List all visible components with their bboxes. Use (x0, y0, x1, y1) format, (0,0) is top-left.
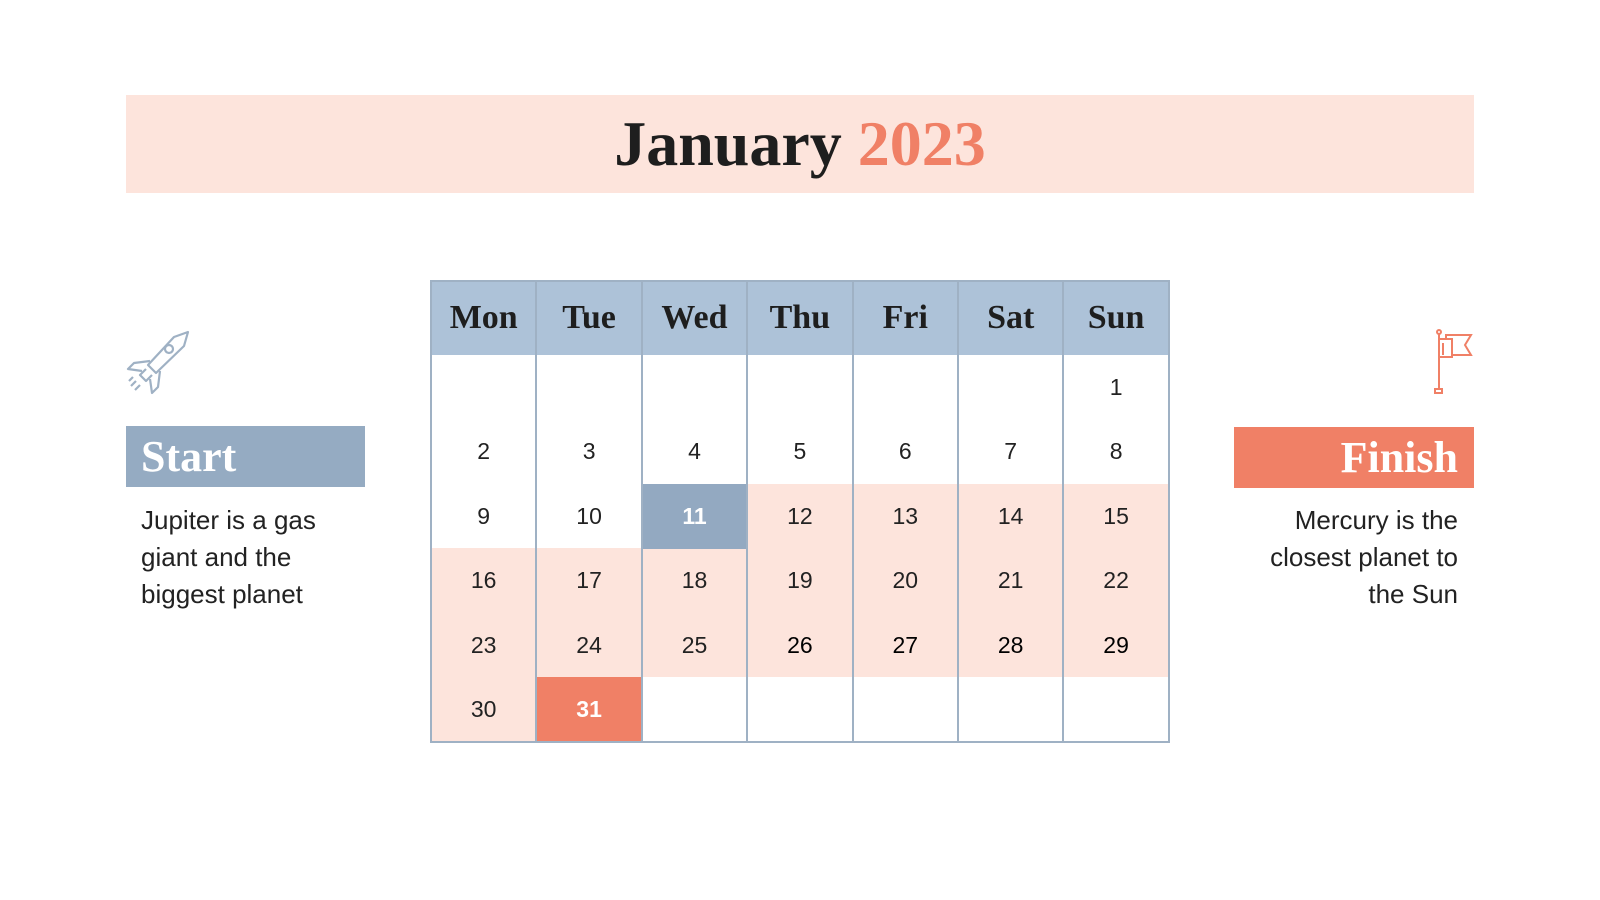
shading (747, 484, 1169, 677)
calendar: Sun (1088, 299, 1144, 336)
calendar: 5 (793, 438, 806, 464)
calendar: 25 (682, 632, 707, 658)
finish text: Mercury is the (1295, 505, 1458, 535)
start label: Start (141, 432, 236, 481)
calendar: Sat (987, 299, 1034, 336)
calendar: Mon (450, 299, 518, 336)
start text (141, 505, 316, 609)
finish text (1270, 505, 1458, 609)
weekday headers (450, 299, 1144, 336)
title text: January 2023 (614, 108, 986, 179)
calendar: 23 (471, 632, 496, 658)
start text: Jupiter is a gas (141, 505, 316, 535)
start text: giant and the (141, 542, 291, 572)
finish text: the Sun (1368, 579, 1458, 609)
calendar: 15 (1103, 503, 1129, 529)
calendar: 3 (583, 438, 595, 464)
calendar: 6 (899, 438, 912, 464)
calendar: 27 (892, 632, 918, 658)
calendar: 4 (688, 438, 701, 464)
grid lines (430, 281, 432, 742)
calendar: Fri (883, 299, 928, 336)
calendar: 28 (998, 632, 1023, 658)
calendar: Tue (562, 299, 616, 336)
calendar: Wed (661, 299, 728, 336)
calendar: 9 (477, 503, 490, 529)
start text: biggest planet (141, 579, 303, 609)
calendar: 7 (1004, 438, 1017, 464)
calendar: 19 (787, 567, 813, 593)
calendar: 31 (576, 696, 602, 722)
calendar: 11 (682, 503, 707, 529)
icon: flag (1434, 329, 1473, 394)
calendar: 26 (787, 632, 813, 658)
calendar: 24 (576, 632, 602, 658)
title banner (126, 95, 1474, 193)
calendar: 14 (998, 503, 1023, 529)
calendar: 2 (477, 438, 490, 464)
dates (471, 374, 1129, 722)
calendar: 10 (576, 503, 602, 529)
calendar: 17 (576, 567, 602, 593)
finish label: Finish (1341, 433, 1458, 482)
calendar: 29 (1103, 632, 1129, 658)
calendar: 18 (682, 567, 707, 593)
icon: rocket (126, 330, 189, 394)
calendar: 16 (471, 567, 496, 593)
calendar: 8 (1110, 438, 1122, 464)
finish text: closest planet to (1270, 542, 1458, 572)
calendar: 13 (892, 503, 918, 529)
calendar: Thu (770, 299, 830, 336)
start label (126, 426, 365, 487)
calendar: 22 (1103, 567, 1129, 593)
calendar: 20 (892, 567, 918, 593)
finish label (1234, 427, 1474, 488)
calendar: 1 (1110, 374, 1122, 400)
calendar: 12 (787, 503, 813, 529)
calendar: 21 (998, 567, 1023, 593)
calendar: 30 (471, 696, 496, 722)
